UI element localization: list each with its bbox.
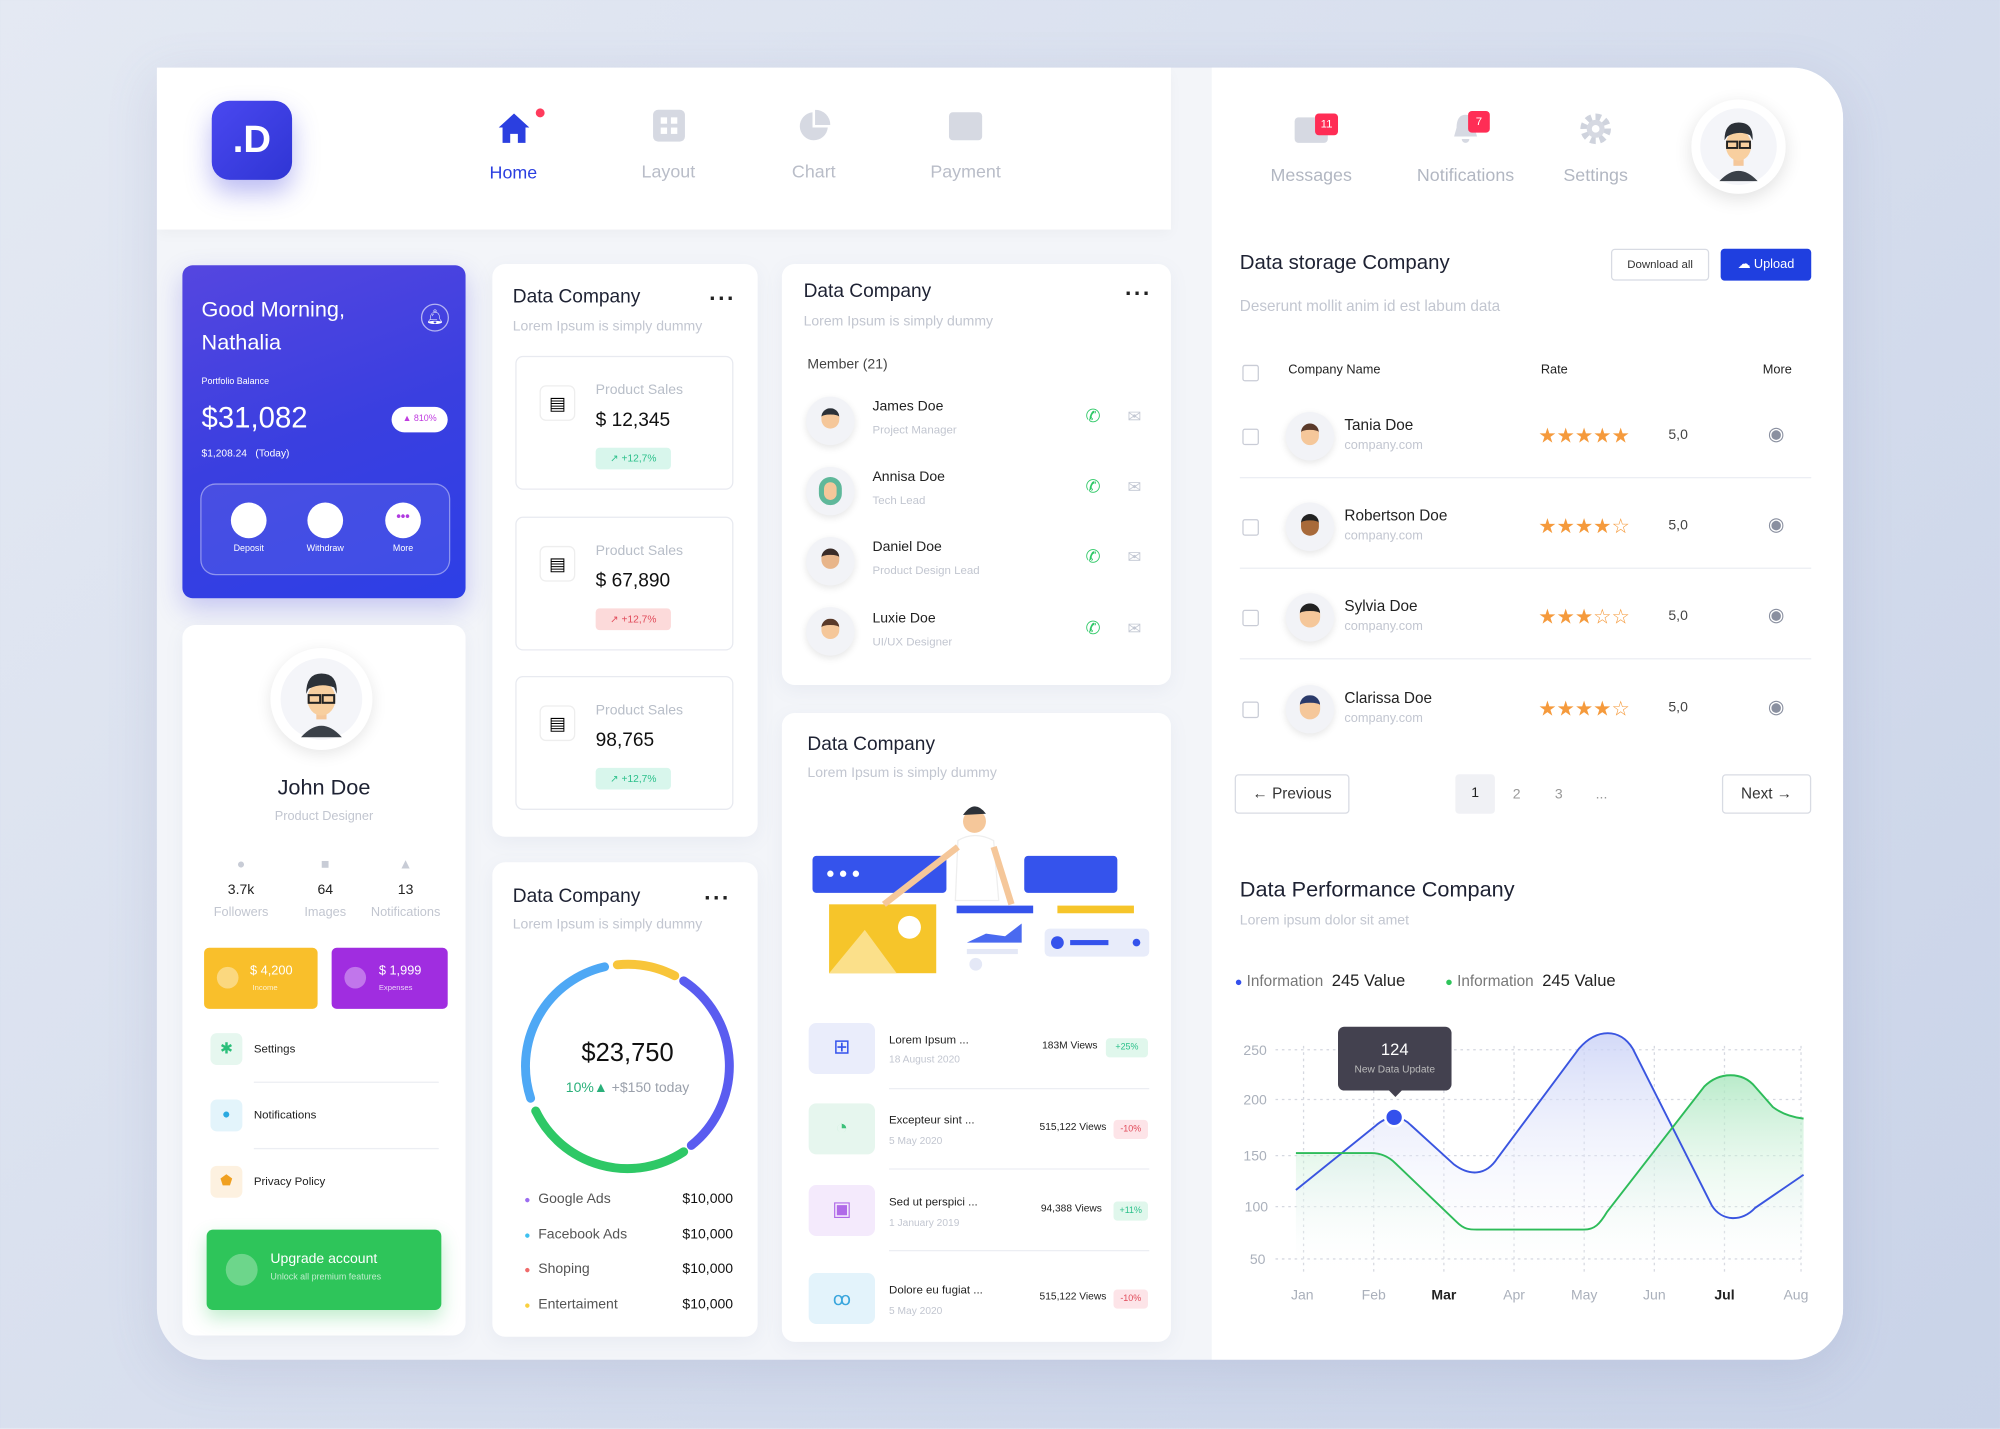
panel: illustration + list: Lorem Ipsum is simply dummy [807,765,997,781]
data table [1240,364,1812,737]
menu [210,1033,242,1065]
greeting balance card: $1,208.24 (Today) [202,448,289,459]
data table: 5,0 [1668,518,1688,533]
pagination [1235,774,1349,814]
panel: illustration + list: +25% [1115,1043,1138,1052]
panel: illustration + list: Data Company [807,733,935,755]
nav: payment [930,112,1001,181]
greeting balance card [182,265,466,598]
buttons [1611,249,1709,281]
tooltip: New Data Update [1354,1064,1435,1075]
panel: members: Annisa Doe [872,469,945,485]
profile card: Notifications [254,1108,316,1121]
panel: members: Data Company [804,281,931,302]
greeting balance card: ▲ 810% [403,415,437,423]
panel: members: Product Design Lead [872,564,980,577]
line chart: 150 [1243,1148,1267,1164]
menu: ✱ [220,1040,233,1057]
panel: members: Lorem Ipsum is simply dummy [804,314,993,329]
profile card: ⬟ [220,1173,233,1189]
greeting balance card: Withdraw [307,545,344,554]
list rows: ⊞ [833,1037,850,1059]
stat box 2: Product Sales [596,543,683,559]
text: Lorem ipsum dolor sit amet [1240,913,1409,929]
top right avatar [1691,99,1786,194]
panel: members: ✉ [1128,477,1141,496]
main dashboard panel [157,68,1843,1360]
panel: members: ✆ [1085,546,1100,566]
panel: donut: $10,000 [682,1227,733,1242]
profile card: Expenses [379,985,412,992]
upgrade button [207,1230,441,1310]
nav: chart: Chart [792,161,836,181]
line chart: 200 [1243,1092,1267,1108]
panel: illustration + list: 5 May 2020 [889,1305,942,1316]
profile card: ▲ [399,857,413,872]
storage heading: Data storage Company [1240,253,1450,274]
text: Next → [1741,784,1792,802]
panel: illustration + list: 18 August 2020 [889,1054,960,1065]
text: 1 [1471,786,1479,801]
panel: illustration + list: Sed ut perspici ... [889,1195,978,1208]
nav: layout: Layout [642,161,695,181]
panel: members: Project Manager [872,423,957,436]
panel: illustration + list: 5 May 2020 [889,1135,942,1147]
text: ☁ Upload [1738,258,1794,272]
data table: company.com [1344,439,1423,453]
line chart: May [1571,1287,1597,1303]
nav: home [490,114,537,182]
panel: members: Luxie Doe [872,611,936,626]
profile card: $ 1,999 [379,964,421,978]
stat box 3: ▤ [549,713,566,733]
profile card: Settings [254,1042,295,1055]
stat box 3: ↗ +12,7% [610,773,656,784]
panel: members [782,264,1171,685]
panel: donut: ··· [704,885,731,911]
text: 11 [1321,117,1332,130]
member rows [806,397,855,445]
panel: donut: ● Shoping [524,1261,590,1277]
panel: illustration + list: +11% [1120,1207,1142,1216]
stat box 3: 98,765 [596,730,654,751]
row 1 [1242,429,1259,445]
panel: members: ✆ [1085,617,1100,638]
data table: 5,0 [1668,700,1688,716]
income / expenses: Income [253,985,278,992]
text: 2 [1513,787,1521,802]
top right: messages: Messages [1271,165,1352,185]
row 2 [1242,519,1259,536]
row 3 [1242,610,1259,626]
panel: donut: ● Entertaiment [524,1297,618,1312]
line chart: Jan [1291,1287,1314,1303]
panel: donut: $10,000 [682,1297,733,1312]
line chart: Jun [1643,1287,1666,1303]
illustration [812,806,1150,974]
logo: .D [233,119,271,161]
nav: chart [792,110,836,181]
stat box 1: Product Sales [596,383,683,398]
stat box 2: ↗ +12,7% [610,614,656,625]
data table: ◉ [1768,423,1785,445]
chart legend: ● Information 245 Value [1235,971,1405,990]
greeting balance card: More [393,545,413,554]
greeting balance card: Good Morning, [202,297,345,321]
tooltip: 124 [1381,1040,1409,1059]
profile card: Notifications [371,906,440,920]
profile card: Product Designer [275,810,373,824]
panel: members: ✉ [1128,407,1141,426]
profile card [182,625,466,1335]
logo [212,101,292,180]
data table: 5,0 [1668,608,1688,624]
row 4 [1242,702,1259,718]
text: 7 [1476,115,1482,128]
data table: company.com [1344,712,1423,726]
line chart: 100 [1245,1199,1268,1215]
stat box 1 [515,356,733,490]
line chart [1243,1032,1808,1303]
profile card: Followers [214,906,268,920]
panel: donut [492,862,758,1337]
donut chart [521,960,734,1174]
line chart: Feb [1362,1287,1386,1303]
panel: product sales: Lorem Ipsum is simply dummy [513,319,702,334]
profile card: 13 [398,883,413,898]
line chart: Jul [1714,1287,1735,1303]
greeting balance card: ••• [396,510,410,524]
panel: illustration + list [782,713,1171,1342]
panel: product sales [492,264,758,837]
data table: Company Name [1288,364,1380,378]
greeting balance card: Deposit [234,545,264,554]
stat box 3 [515,676,733,810]
panel: donut: ● Google Ads [524,1191,611,1207]
panel: illustration + list: 515,122 Views [1040,1291,1106,1302]
nav: payment: Payment [930,161,1001,181]
profile card: ■ [321,857,330,872]
panel: members: ✉ [1128,619,1141,638]
data table: company.com [1344,529,1423,543]
nav: layout [642,110,696,181]
panel: donut: $23,750 [581,1040,674,1068]
panel: illustration + list: ◔ [836,1117,848,1139]
tooltip [1338,1027,1452,1091]
stat box 2: ▤ [549,554,566,574]
stat box 1: ↗ +12,7% [610,453,656,464]
panel: illustration + list: 515,122 Views [1040,1121,1106,1133]
panel: illustration + list: Lorem Ipsum ... [889,1033,969,1046]
pagination: ← Previous [1253,784,1332,802]
text: ● Information 245 Value [1445,971,1616,990]
panel: members: ··· [1125,281,1152,306]
line chart: Apr [1503,1287,1525,1303]
panel: members: ✉ [1128,547,1141,566]
panel: donut: $10,000 [682,1261,733,1277]
stat box 3: Product Sales [596,703,683,718]
line chart: 50 [1250,1251,1266,1267]
stat box 2: $ 67,890 [596,570,670,592]
greeting balance card: $31,082 [202,401,308,434]
data table: ◉ [1768,605,1785,626]
greeting balance card: Portfolio Balance [202,378,269,386]
panel: illustration + list: 1 January 2019 [889,1217,959,1228]
profile card: John Doe [278,776,370,800]
panel: product sales: ··· [709,286,736,311]
stat box 1: ▤ [549,393,566,413]
panel: illustration + list: -10% [1120,1295,1141,1304]
profile card: Privacy Policy [254,1175,325,1187]
panel: illustration + list: Excepteur sint ... [889,1114,975,1126]
avatar [270,648,372,750]
data table: ◉ [1768,514,1785,536]
list rows [809,1023,875,1074]
donut legend [524,1191,733,1312]
stat box 2 [515,517,733,651]
income / expenses [204,948,318,1009]
panel: donut: 10%▲ +$150 today [566,1080,689,1096]
panel: donut: Data Company [513,885,640,907]
top right: settings: Settings [1563,165,1628,185]
panel: donut: ● Facebook Ads [524,1227,627,1242]
data table: Robertson Doe [1344,506,1447,524]
panel: donut: Lorem Ipsum is simply dummy [513,917,702,932]
text: 3 [1555,787,1563,802]
data table: company.com [1344,620,1423,634]
panel: illustration + list: ꝏ [833,1288,851,1309]
data table: ★★★★☆ [1538,699,1630,721]
panel: illustration + list: 94,388 Views [1041,1203,1102,1214]
data table: More [1763,364,1792,378]
panel: members: ✆ [1085,406,1100,426]
greeting balance card: Nathalia [202,330,281,355]
buttons: Download all [1627,258,1693,270]
panel: members: James Doe [872,399,943,415]
profile card: ● [222,1107,231,1122]
data table: Rate [1541,364,1568,378]
line chart: Mar [1431,1287,1457,1303]
profile card: Images [304,906,346,920]
panel: illustration + list: ▣ [832,1199,851,1221]
data table: Sylvia Doe [1344,597,1418,615]
data table: ★★★★★ [1538,426,1630,448]
panel: illustration + list: 183M Views [1042,1040,1097,1051]
top right: messages [1271,117,1352,185]
panel: members: Tech Lead [872,494,925,506]
data table: ◉ [1768,696,1785,718]
panel: members: ✆ [1085,476,1100,496]
nav: home: Home [490,162,537,182]
text: Deserunt mollit anim id est labum data [1240,297,1500,315]
panel: members: UI/UX Designer [872,635,952,648]
data table: ★★★☆☆ [1538,607,1630,629]
top right: notifications [1417,114,1514,185]
profile card: 3.7k [228,883,254,898]
data table: 5,0 [1668,427,1688,443]
panel: members: Daniel Doe [872,540,942,555]
panel: product sales: Data Company [513,286,640,307]
text: ... [1596,787,1607,802]
panel: members: Member (21) [807,357,888,372]
panel: illustration + list: -10% [1120,1125,1141,1134]
top right: notifications: Notifications [1417,165,1514,185]
upgrade button: Unlock all premium features [270,1273,381,1282]
upgrade button: Upgrade account [270,1251,377,1267]
income / expenses: $ 4,200 [250,964,293,978]
data table: Tania Doe [1344,416,1413,434]
greeting balance card: 🔔︎ [426,310,444,325]
performance heading: Data Performance Company [1240,878,1515,902]
profile card: 64 [317,883,333,898]
top right: settings [1563,114,1628,185]
data table: Clarissa Doe [1344,689,1432,707]
stat box 1: $ 12,345 [596,409,670,431]
panel: illustration + list: Dolore eu fugiat ... [889,1283,983,1296]
panel: donut: $10,000 [682,1191,733,1207]
line chart: Aug [1783,1287,1808,1303]
line chart: 250 [1243,1042,1267,1058]
data table: ★★★★☆ [1538,517,1630,538]
profile card: ● [237,857,245,872]
